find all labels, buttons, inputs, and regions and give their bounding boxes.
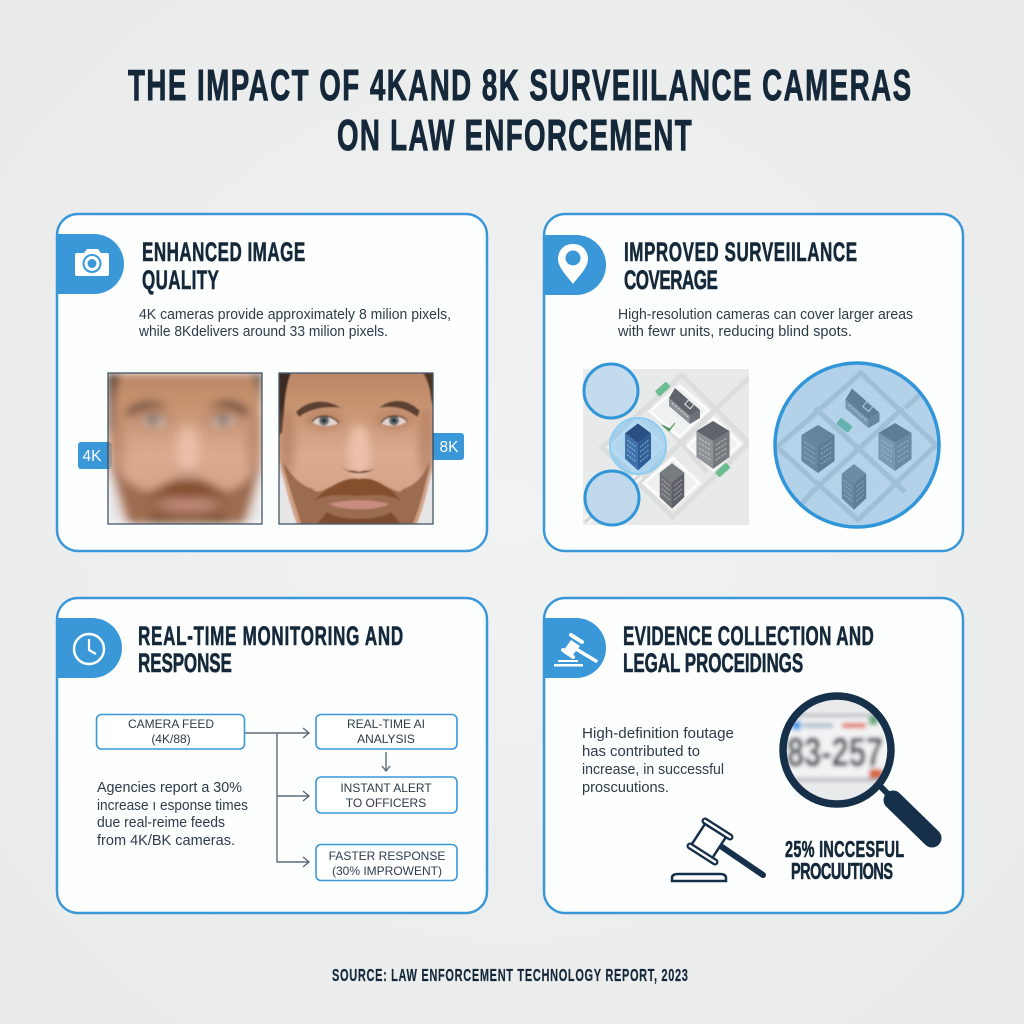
heading (138, 621, 403, 678)
body text: has contributed to (582, 744, 700, 760)
icon: gavel (544, 618, 606, 678)
title: THE IMPACT OF 4KAND 8K SURVEIILANCE CAMERAS (128, 61, 911, 110)
icon: camera (57, 234, 124, 294)
flow box: camera feed: (4K/88) (151, 732, 191, 746)
body text (138, 307, 451, 340)
flow box: instant alert: TO OFFICERS (346, 796, 426, 810)
photo: sharp 8K face (279, 373, 434, 524)
heading: IMPROVED SURVEIILANCE (624, 237, 857, 267)
title (128, 61, 911, 160)
stat callout (785, 838, 904, 885)
heading: RESPONSE (138, 648, 232, 678)
title: ON LAW ENFORCEMENT (337, 111, 692, 160)
heading (624, 237, 857, 295)
flow box: AI analysis: REAL-TIME AI (347, 717, 425, 731)
buildings (660, 388, 730, 509)
heading: EVIDENCE COLLECTION AND (623, 621, 874, 651)
body text: increase ı esponse times (97, 798, 248, 814)
body text: 4K cameras provide approximately 8 milion pixels, (139, 307, 451, 323)
body text: while 8Kdelivers around 33 milion pixels. (138, 324, 388, 340)
4K tag (78, 442, 112, 469)
heading: COVERAGE (624, 265, 718, 295)
flow box: faster response: FASTER RESPONSE (329, 849, 445, 863)
body text: increase, in successful (582, 762, 724, 778)
icon: location pin (544, 235, 606, 295)
body text (582, 726, 734, 796)
stat callout: PROCUUTIONS (791, 860, 893, 885)
icon: magnifying glass over licence plate (780, 696, 932, 838)
map: city blocks with small coverage circles (583, 364, 749, 525)
icon: gavel outline (672, 821, 763, 881)
heading: ENHANCED IMAGE (142, 237, 305, 267)
body text: proscuutions. (582, 780, 669, 796)
body text: due real-reime feeds (97, 815, 225, 831)
flow connectors (245, 728, 390, 867)
body text: High-resolution cameras can cover larger areas (618, 307, 913, 323)
body text: High-definition foutage (582, 726, 734, 742)
body text (617, 307, 913, 340)
heading (623, 621, 874, 678)
icon: clock (57, 618, 122, 678)
heading: LEGAL PROCEIDINGS (623, 648, 803, 678)
8K tag (430, 433, 464, 460)
panel: improved surveillance coverage (544, 214, 963, 551)
flow box: faster response: (30% IMPROWENT) (332, 864, 442, 878)
body text: with fewr units, reducing blind spots. (617, 324, 852, 340)
flow box: camera feed: CAMERA FEED (128, 717, 214, 731)
body text (97, 780, 248, 849)
map: large coverage circle (775, 363, 945, 530)
panel: enhanced image quality (57, 214, 487, 551)
source line: SOURCE: LAW ENFORCEMENT TECHNOLOGY REPORT, 2023 (332, 967, 688, 986)
small coverage circle top (584, 364, 638, 418)
photo: blurred 4K face (108, 373, 263, 524)
panel: evidence collection and legal proceedings (544, 598, 963, 913)
highlighted camera zone (610, 418, 666, 474)
heading (142, 237, 305, 295)
heading: QUALITY (142, 265, 219, 295)
flow box: AI analysis (316, 714, 457, 749)
flow box: instant alert: INSTANT ALERT (340, 781, 432, 795)
heading: REAL-TIME MONITORING AND (138, 621, 403, 651)
panel: real-time monitoring and response (57, 598, 487, 913)
flow box: camera feed (96, 714, 244, 749)
flow box: AI analysis: ANALYSIS (357, 732, 415, 746)
small coverage circle bottom (585, 471, 639, 525)
stat callout: 25% INCCESFUL (785, 838, 904, 863)
body text: from 4K/BK cameras. (97, 833, 235, 849)
8K tag: 8K (440, 439, 459, 456)
icon: magnifying glass over licence plate: 83-257 (787, 729, 883, 775)
4K tag: 4K (83, 448, 102, 465)
body text: Agencies report a 30% (97, 780, 242, 796)
flow box: faster response (316, 844, 457, 880)
flow box: instant alert (316, 777, 457, 813)
